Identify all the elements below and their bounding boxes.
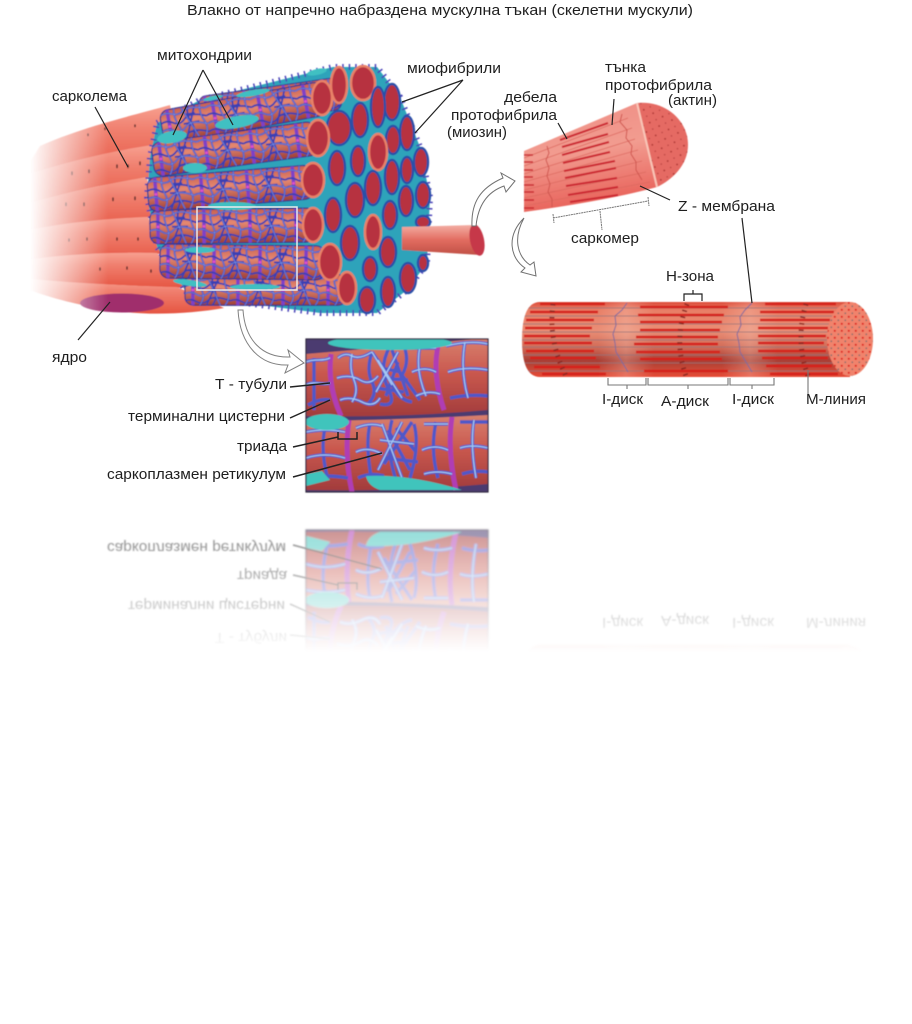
bundle base: [147, 67, 430, 313]
label: thick protofibril: дебела: [504, 89, 558, 106]
label: thick protofibril: [447, 89, 558, 141]
label: nucleus: ядро: [52, 349, 87, 366]
sarcolemma outer bands: [20, 105, 224, 314]
label: thin protofibril: протофибрила: [605, 77, 713, 94]
mirrored reflection: М-линия: [806, 614, 866, 631]
label: I disc right: I-диск: [732, 391, 774, 408]
mirrored reflection: саркоплазмен ретикулум: [107, 539, 286, 556]
label: triad: триада: [237, 438, 288, 455]
arrow: box to inset: [238, 310, 304, 373]
mirrored reflection: [106, 528, 866, 643]
label: Z membrane: Z - мембрана: [678, 198, 776, 215]
label: thin protofibril: тънка: [605, 59, 647, 76]
leader lines: [78, 70, 752, 477]
title: Влакно от напречно набраздена мускулна тъкан (скелетни мускули): [187, 2, 693, 19]
label: A disc: А-диск: [661, 393, 709, 410]
label: terminal cisternae: терминални цистерни: [128, 408, 285, 425]
label: myofibrils: миофибрили: [407, 60, 501, 77]
small myofibril rod: [402, 223, 487, 257]
label: thin protofibril: (актин): [668, 92, 717, 109]
selection box on fibre: [197, 207, 297, 290]
inset reticulum network: [306, 342, 488, 482]
myofibril tubes: [147, 77, 347, 305]
mirrored reflection: I-диск: [602, 614, 643, 631]
label: mitochondria: митохондрии: [157, 47, 252, 64]
inset: T-tubules magnified: [305, 336, 488, 492]
myofibril end faces: [302, 66, 430, 313]
arrow: protofibril to cylinder: [512, 218, 536, 276]
sarcolemma pores: [66, 125, 151, 272]
inset lower myofibril: [306, 415, 488, 490]
label: sarcolemma: сарколема: [52, 88, 128, 105]
label: sarcoplasmic reticulum: саркоплазмен ретикулум: [107, 466, 286, 483]
mirrored reflection: А-диск: [661, 612, 709, 629]
label: thick protofibril: (миозин): [447, 124, 507, 141]
mirrored reflection: терминални цистерни: [128, 597, 285, 614]
mitochondria: [156, 67, 327, 290]
mirrored reflection: Т - тубули: [215, 629, 287, 646]
inset tubule bands: [330, 346, 456, 492]
grey brackets: [553, 197, 808, 395]
arrow: rod to protofibril: [472, 173, 515, 226]
illustration: sarcomere cylinder: [522, 302, 873, 377]
inset upper myofibril: [306, 338, 488, 416]
label: thin protofibril: [605, 59, 717, 109]
label: M line: М-линия: [806, 391, 866, 408]
mirrored reflection: I-диск: [732, 614, 774, 631]
label: T tubules: Т - тубули: [215, 376, 287, 393]
inset mitochondria: [328, 336, 452, 350]
label: I disc left: I-диск: [602, 391, 643, 408]
illustration: muscle fibre: [20, 66, 487, 314]
label: thick protofibril: протофибрила: [451, 107, 558, 124]
illustration: sarcomere fibril: [524, 103, 688, 212]
nucleus: [80, 294, 164, 312]
label: sarcomere: саркомер: [571, 230, 639, 247]
mirrored reflection: триада: [237, 567, 288, 584]
label: H zone: Н-зона: [666, 268, 715, 285]
